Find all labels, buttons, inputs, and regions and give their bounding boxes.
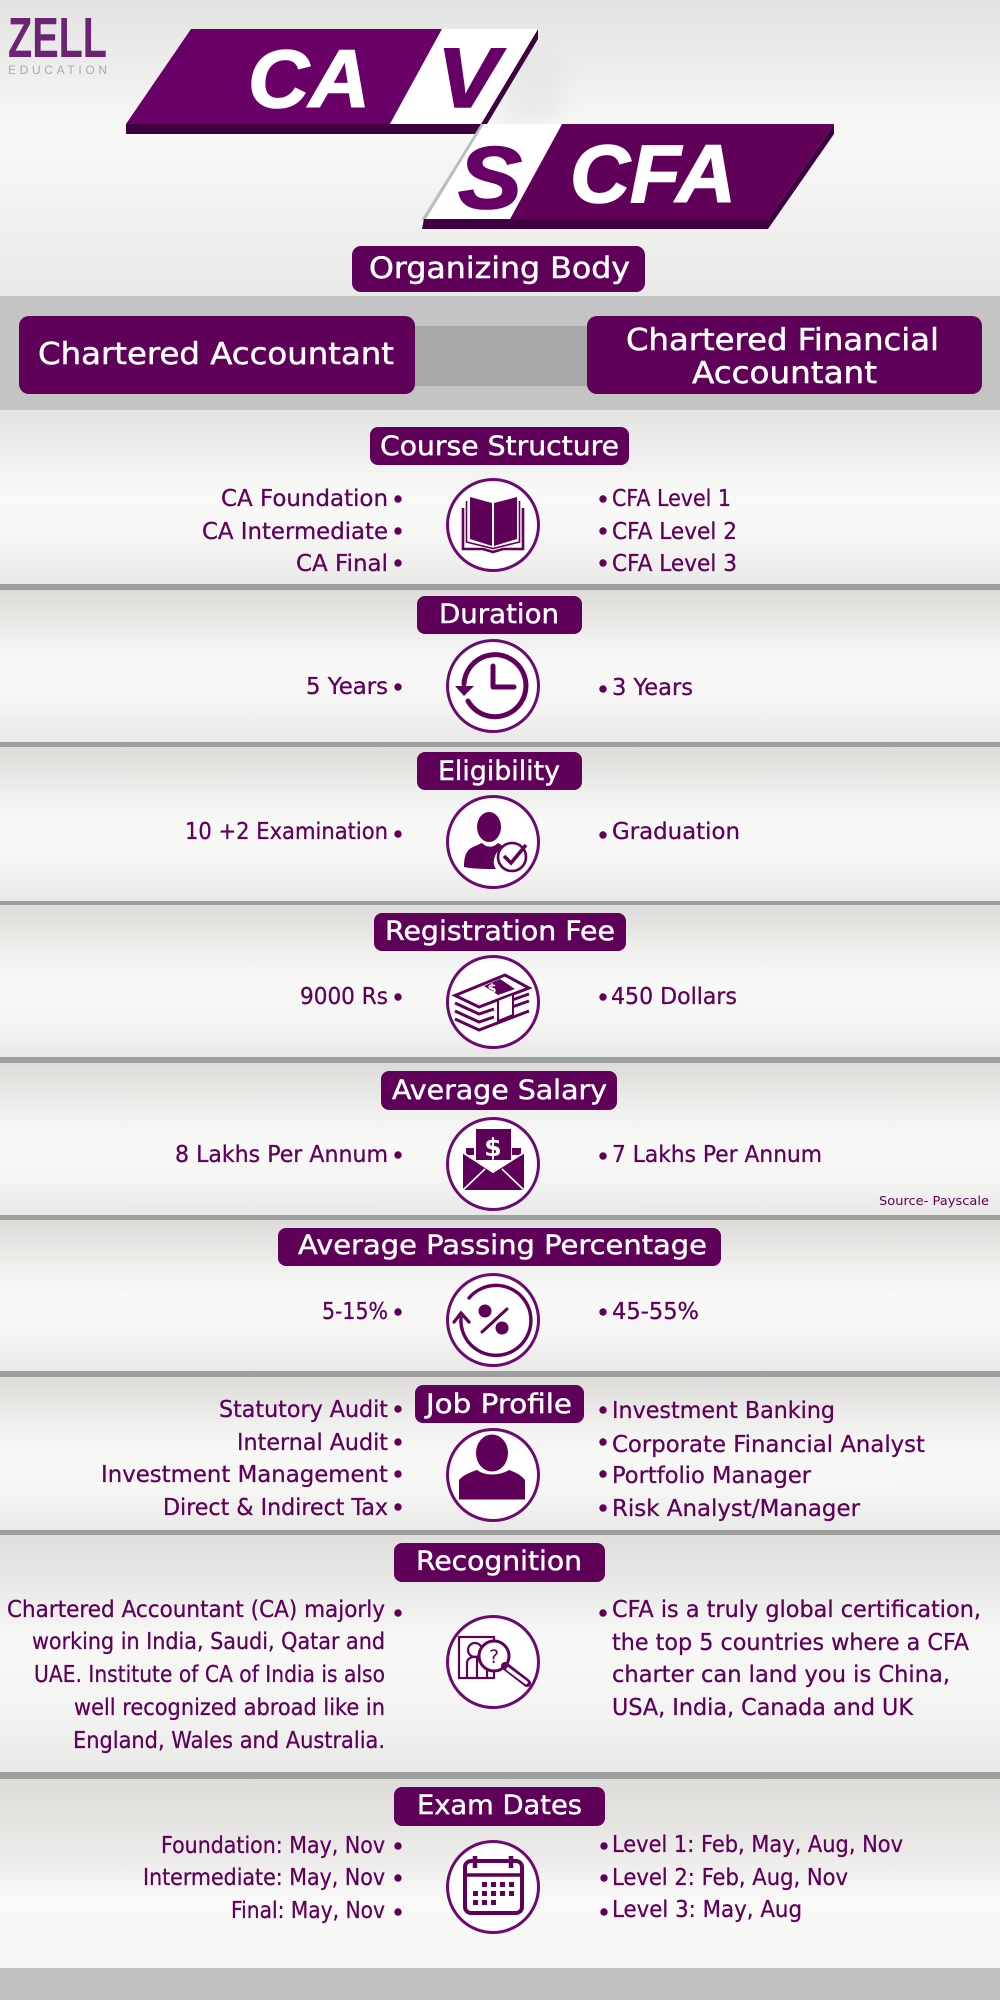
list: CFA job profiles: Investment Banking	[612, 1398, 835, 1424]
heading: Exam Dates: Exam Dates	[417, 1790, 582, 1821]
heading: Average Passing Percentage: Average Passing Percentage	[298, 1230, 707, 1261]
text: CFA salary: 7 Lakhs Per Annum	[612, 1142, 822, 1168]
list: CFA exam dates: Level 3: May, Aug	[612, 1897, 802, 1923]
heading: Organizing Body: Organizing Body	[369, 251, 630, 285]
title banner: S CFA: CFA	[570, 129, 736, 220]
list: CA job profiles: Investment Management	[101, 1462, 388, 1488]
list: CA course levels: CA Final	[296, 551, 388, 577]
header panel	[0, 0, 1000, 296]
text: CFA recognition: USA, India, Canada and UK	[612, 1695, 914, 1721]
heading: Average Passing Percentage	[278, 1228, 721, 1266]
list: CA job profiles: Internal Audit	[237, 1430, 388, 1456]
logo: Zell Education	[8, 6, 107, 77]
text: CFA eligibility: Graduation	[612, 819, 740, 845]
heading: Duration	[417, 596, 582, 634]
list: CFA levels: CFA Level 1	[612, 486, 731, 512]
icon: magnifier over people	[448, 1616, 538, 1708]
panel: exam dates	[0, 1779, 1000, 1968]
list: CA course levels	[202, 486, 402, 577]
text: CFA recognition: CFA is a truly global certification,	[612, 1597, 981, 1623]
text: CFA recognition: charter can land you is China,	[612, 1662, 950, 1688]
title banner: S CFA	[422, 124, 834, 229]
icon: open book	[448, 480, 538, 570]
list: CA job profiles	[101, 1397, 402, 1521]
text: CA pass rate: 5-15%	[322, 1299, 388, 1325]
panel: eligibility	[0, 747, 1000, 901]
text: CA registration fee: 9000 Rs	[300, 984, 388, 1010]
heading: Job Profile: Job Profile	[424, 1389, 572, 1420]
list: CFA job profiles	[599, 1398, 925, 1522]
list: CA job profiles: Direct & Indirect Tax	[163, 1495, 388, 1521]
text: CFA duration: 3 Years	[612, 675, 693, 701]
heading: Eligibility	[417, 752, 582, 790]
text: CA recognition: Chartered Accountant (CA) majorly	[7, 1597, 385, 1623]
heading: Registration Fee	[374, 913, 626, 951]
icon: magnifier over people: ?	[489, 1646, 499, 1668]
list: CA job profiles: Statutory Audit	[219, 1397, 388, 1423]
text: CFA recognition: the top 5 countries where a CFA	[612, 1630, 969, 1656]
list: CFA exam dates: Level 1: Feb, May, Aug, Nov	[612, 1832, 903, 1858]
panel: average salary	[0, 1063, 1000, 1215]
list: CA exam dates: Foundation: May, Nov	[161, 1833, 385, 1859]
box: Chartered Financial Accountant	[587, 316, 982, 394]
panel: duration	[0, 590, 1000, 742]
icon: envelope with dollar	[448, 1118, 538, 1210]
title banner: S CFA: S	[458, 128, 522, 227]
text: CA eligibility: 10 +2 Examination	[185, 819, 388, 845]
text: CA recognition: working in India, Saudi, Qatar and	[32, 1629, 385, 1655]
title banner: CA V: V	[437, 31, 506, 125]
panel: job profile	[0, 1377, 1000, 1530]
text: CA recognition: England, Wales and Australia.	[73, 1728, 385, 1754]
logo: Zell Education: ZELL	[8, 6, 107, 70]
list: CFA exam dates	[600, 1832, 903, 1923]
list: CA course levels: CA Intermediate	[202, 519, 388, 545]
source note: Source- Payscale	[879, 1193, 989, 1208]
box: Chartered Financial Accountant: Chartered Financial	[626, 323, 939, 358]
title banner: CA V	[126, 29, 565, 134]
icon: percent with cycle arrow	[448, 1274, 538, 1366]
icon: person with check	[448, 796, 538, 888]
list: CFA job profiles: Corporate Financial Analyst	[612, 1432, 925, 1458]
panel: registration fee	[0, 905, 1000, 1057]
list: CFA levels	[599, 486, 737, 577]
title banner: CA V: CA	[248, 34, 370, 125]
text: CFA registration fee: 450 Dollars	[611, 984, 737, 1010]
heading: Recognition: Recognition	[416, 1546, 582, 1577]
heading: Duration: Duration	[439, 599, 559, 630]
text: CA recognition: well recognized abroad like in	[74, 1695, 385, 1721]
heading: Course Structure: Course Structure	[380, 431, 619, 462]
list: CA exam dates: Intermediate: May, Nov	[143, 1865, 385, 1891]
heading: Job Profile	[415, 1385, 584, 1423]
heading: Eligibility: Eligibility	[438, 756, 560, 787]
box: Chartered Accountant	[19, 316, 415, 394]
icon: envelope with dollar: $	[484, 1133, 502, 1162]
panel: average passing percentage	[0, 1220, 1000, 1371]
icon: stack of money	[448, 956, 538, 1048]
icon: calendar	[448, 1842, 538, 1932]
list: CA exam dates	[143, 1833, 402, 1924]
heading: Exam Dates	[394, 1787, 605, 1826]
heading: Average Salary: Average Salary	[392, 1075, 607, 1106]
list: CFA job profiles: Portfolio Manager	[612, 1463, 812, 1489]
heading: Organizing Body	[352, 246, 645, 292]
text: CFA pass rate: 45-55%	[612, 1299, 699, 1325]
list: CA exam dates: Final: May, Nov	[231, 1898, 385, 1924]
icon: clock with arrow	[448, 640, 538, 732]
list: CFA job profiles: Risk Analyst/Manager	[612, 1496, 861, 1522]
text: CFA recognition	[599, 1597, 981, 1721]
heading: Recognition	[394, 1543, 605, 1582]
box: Chartered Financial Accountant: Accountant	[692, 356, 877, 391]
list: CFA levels: CFA Level 2	[612, 519, 737, 545]
heading: Average Salary	[381, 1071, 617, 1110]
icon: person	[448, 1430, 538, 1520]
text: CA salary: 8 Lakhs Per Annum	[175, 1142, 388, 1168]
text: CA recognition	[7, 1597, 402, 1754]
logo: Zell Education: EDUCATION	[8, 63, 107, 77]
panel: recognition	[0, 1535, 1000, 1772]
heading: Registration Fee: Registration Fee	[385, 916, 615, 947]
list: CFA levels: CFA Level 3	[612, 551, 737, 577]
list: CFA exam dates: Level 2: Feb, Aug, Nov	[612, 1865, 848, 1891]
panel: course structure	[0, 410, 1000, 584]
icon: stack of money: $	[487, 982, 497, 997]
list: CA course levels: CA Foundation	[221, 486, 388, 512]
text: CA duration: 5 Years	[306, 674, 388, 700]
text: CA recognition: UAE. Institute of CA of India is also	[34, 1662, 385, 1688]
panel: organizing body	[0, 296, 1000, 410]
box: Chartered Accountant: Chartered Accountant	[38, 337, 394, 372]
